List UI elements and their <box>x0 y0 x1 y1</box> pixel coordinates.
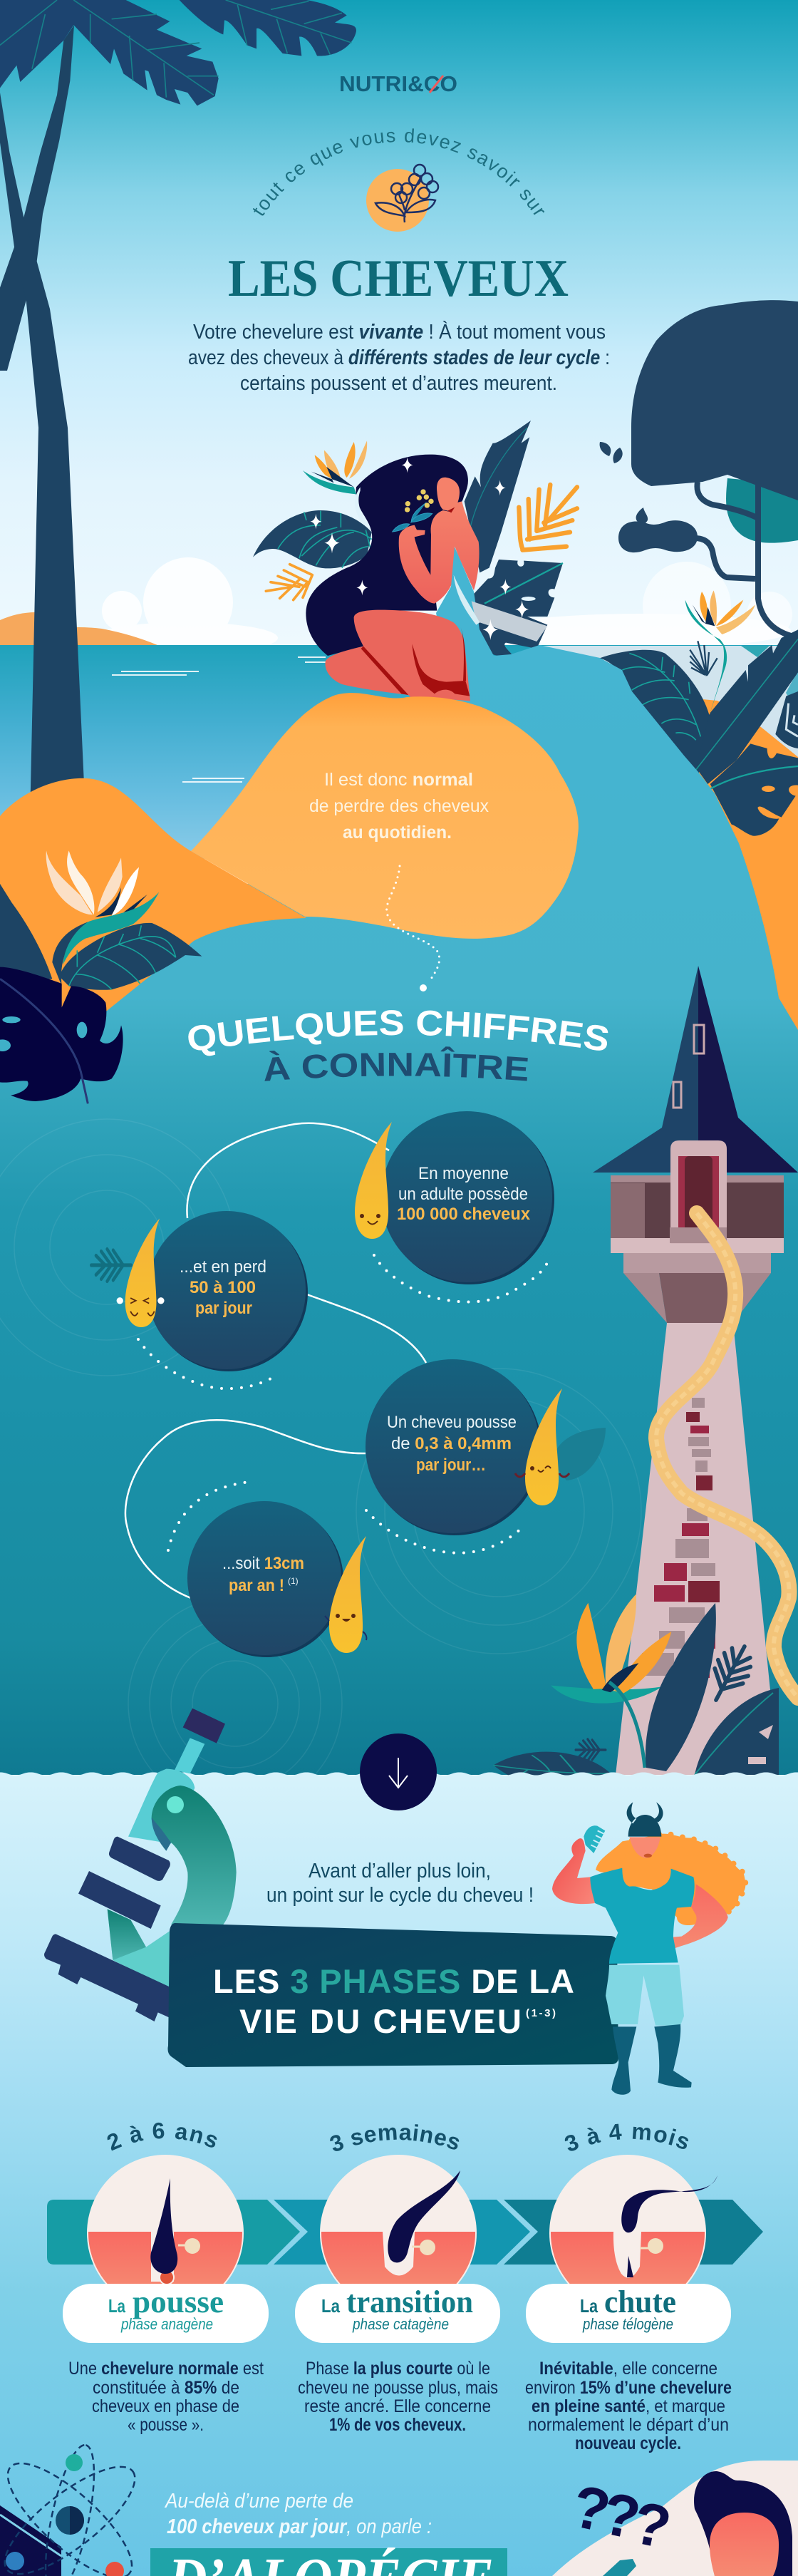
clouds <box>93 557 792 654</box>
diagram <box>87 2155 244 2284</box>
torso <box>590 1868 695 1964</box>
viking character <box>552 1802 745 2095</box>
eyepiece <box>183 1709 225 1743</box>
stat circle 1 <box>381 1111 554 1284</box>
label pill: phase catagène <box>352 2315 449 2333</box>
dotted arcs <box>138 1255 549 1553</box>
white bird of paradise <box>46 850 93 915</box>
veined leaf <box>59 923 202 990</box>
left arm <box>552 1838 595 1904</box>
distant island <box>0 612 157 645</box>
label pill: transition <box>346 2284 473 2319</box>
navy monstera <box>0 967 123 1101</box>
description: 1% de vos cheveux. <box>329 2415 466 2435</box>
stat circle 3: de 0,3 à 0,4mm <box>391 1434 512 1453</box>
right orange shore <box>608 693 798 1030</box>
description: environ 15% d’une chevelure <box>525 2378 732 2398</box>
stat circle 4: (1) <box>288 1576 299 1586</box>
heading: quelques chiffres <box>188 1010 608 1081</box>
duration: 2 à 6 ans <box>107 2123 217 2151</box>
sheer veil band <box>472 601 547 642</box>
shorts <box>606 1965 684 2026</box>
veined leaf <box>600 650 716 775</box>
banner: les 3 phases: LES 3 PHASES DE LA <box>213 1962 574 2000</box>
tower <box>593 966 798 1775</box>
title: LES CHEVEUX <box>228 249 569 308</box>
torso and arm <box>399 501 480 604</box>
spire <box>698 966 798 1173</box>
second palm leaf <box>180 0 356 56</box>
background fern and monstera behind stats <box>91 1249 606 1480</box>
intro text: Votre chevelure est vivante ! À tout moment vous <box>193 320 606 344</box>
wall <box>611 1175 784 1238</box>
stat circle 3: Un cheveu pousse <box>387 1413 517 1432</box>
heading: quelques chiffres: QUELQUES CHIFFRES <box>188 1010 608 1056</box>
dotted path from blob <box>387 866 440 991</box>
diagram <box>549 2155 717 2284</box>
light body <box>128 1769 195 1844</box>
banner: les 3 phases <box>168 1923 618 2067</box>
teal petal <box>52 922 88 986</box>
face <box>629 1837 660 1858</box>
stat circle 4: ...soit 13cm <box>222 1554 304 1573</box>
description: normalement le départ d’un <box>528 2415 729 2435</box>
duration: 3 à 4 mois <box>564 2124 688 2151</box>
flower sprig <box>393 503 432 532</box>
label pill: La <box>321 2295 340 2317</box>
right arm <box>664 1884 728 1949</box>
sparkles over woman <box>310 457 529 640</box>
thigh <box>325 610 470 723</box>
description: reste ancré. Elle concerne <box>304 2396 491 2416</box>
label pill <box>295 2284 500 2343</box>
stat circle 2: par jour <box>195 1299 252 1318</box>
blob text: Il est donc normal <box>324 770 473 790</box>
blob text: de perdre des cheveux <box>309 796 489 816</box>
face <box>437 478 460 511</box>
main palm leaf <box>0 0 219 105</box>
label pill: phase anagène <box>120 2315 213 2333</box>
curly hair <box>596 1834 745 1925</box>
stat circle 2 <box>147 1211 308 1371</box>
label pill: phase télogène <box>582 2315 673 2333</box>
lens dot <box>167 1796 184 1813</box>
alopecia intro text: Au-delà d’une perte de <box>164 2490 353 2513</box>
shaft <box>616 1323 779 1775</box>
blob text <box>309 770 489 843</box>
intro text <box>188 320 610 395</box>
description: Inévitable, elle concerne <box>539 2359 717 2379</box>
stat circle 1: un adulte possède <box>398 1185 528 1204</box>
braid <box>656 1213 798 1698</box>
label pill: La <box>108 2295 125 2317</box>
woman: background plants and upper body <box>253 421 577 656</box>
right shore plants <box>600 590 798 836</box>
heading: quelques chiffres: À CONNAÎTRE <box>264 1046 528 1081</box>
dark leg shading <box>412 644 470 696</box>
blob text: au quotidien. <box>343 823 452 843</box>
phase 1: la pousse <box>63 2123 269 2435</box>
description: constituée à 85% de <box>93 2378 239 2398</box>
upper bar <box>109 1837 170 1881</box>
tube <box>175 1738 204 1773</box>
stat circle 2: ...et en perd <box>180 1257 266 1277</box>
question marks: ? <box>566 2472 616 2545</box>
middle bar <box>78 1871 161 1929</box>
base column <box>108 1909 176 1991</box>
monstera <box>710 743 798 836</box>
bricks <box>642 1398 715 1676</box>
description: nouveau cycle. <box>575 2433 681 2453</box>
right jungle tree <box>600 300 798 636</box>
question marks <box>566 2472 677 2562</box>
hair <box>306 455 468 656</box>
phase 2: la transition <box>295 2124 500 2435</box>
intro text: certains poussent et d’autres meurent. <box>240 372 557 395</box>
bird of paradise <box>700 592 708 622</box>
monstera <box>472 560 563 656</box>
banner: les 3 phases: VIE DU CHEVEU <box>239 2002 522 2040</box>
wavy edge <box>0 1771 798 1779</box>
left orange hill <box>0 778 306 1011</box>
connecting white lines <box>125 1123 426 1598</box>
label pill <box>63 2284 269 2343</box>
description <box>68 2359 264 2435</box>
stat circle 4 <box>187 1501 343 1657</box>
base bar <box>44 1934 171 2021</box>
navy leaf at edge <box>0 884 52 982</box>
sea <box>0 645 798 859</box>
face <box>710 2513 779 2576</box>
hair and beard <box>694 2471 792 2576</box>
label pill: La <box>580 2295 598 2317</box>
sky background <box>0 0 798 645</box>
duration: 3 semaines <box>330 2124 459 2151</box>
ledge <box>611 1238 784 1253</box>
leaf left <box>253 510 372 568</box>
small orange fern <box>266 565 312 600</box>
description: « pousse ». <box>128 2415 204 2435</box>
icon: microscope <box>44 1709 237 2021</box>
phase 3: la chute <box>525 2124 732 2453</box>
alopecia intro text: 100 cheveux par jour, on parle : <box>167 2515 432 2538</box>
small fern <box>690 641 717 676</box>
orange blob island <box>191 693 579 939</box>
trunks <box>0 25 74 371</box>
stat circle 3: par jour… <box>416 1456 486 1475</box>
label pill <box>526 2284 731 2343</box>
orange fern right <box>519 485 577 550</box>
sea highlights <box>112 657 611 782</box>
bird of paradise <box>315 455 333 480</box>
question marks: ? <box>627 2488 677 2562</box>
arrow button <box>360 1733 437 1810</box>
intro text: avez des cheveux à différents stades de leur cycle : <box>188 346 610 369</box>
description: Phase la plus courte où le <box>306 2359 490 2379</box>
lower light section <box>0 1778 798 2576</box>
description <box>298 2359 498 2435</box>
hair characters <box>117 1122 569 1653</box>
description: en pleine santé, et marque <box>532 2396 725 2416</box>
curved tagline: tout ce que vous devez savoir sur <box>252 128 544 215</box>
description <box>525 2359 732 2453</box>
logo: NUTRI&CO <box>339 71 457 96</box>
timeline arrows <box>47 2200 763 2265</box>
intro line before phases: Avant d’aller plus loin, <box>309 1860 491 1882</box>
icon: orange circle with flower <box>366 165 438 232</box>
dormer <box>670 1140 727 1244</box>
palm tree left <box>0 0 356 820</box>
stat circle 1: 100 000 cheveux <box>397 1205 531 1224</box>
boots <box>611 2024 692 2095</box>
stat circle 2: 50 à 100 <box>190 1278 256 1297</box>
tower foot plants <box>492 1587 779 1794</box>
alopecia intro text <box>164 2490 432 2538</box>
water swirl texture <box>0 1119 641 1810</box>
beard <box>622 1837 671 1889</box>
label pill: pousse <box>133 2284 224 2319</box>
comb <box>603 2559 636 2576</box>
stat circle 1: En moyenne <box>418 1164 509 1183</box>
label pill: chute <box>604 2284 676 2319</box>
description: Une chevelure normale est <box>68 2359 264 2379</box>
description: cheveu ne pousse plus, mais <box>298 2378 498 2398</box>
comb <box>584 1825 605 1853</box>
far right fern <box>775 691 798 748</box>
stat circle 3 <box>366 1359 542 1535</box>
question marks: ? <box>596 2479 646 2552</box>
long feather leaf <box>696 629 798 784</box>
pale sea at right <box>542 646 798 777</box>
description: cheveux en phase de <box>92 2396 239 2416</box>
left shore plants <box>0 850 202 1103</box>
bottom right character <box>552 2461 798 2576</box>
diagram <box>320 2155 477 2284</box>
teal water section <box>0 547 798 1775</box>
green arm <box>152 1786 237 1925</box>
intro line before phases <box>266 1860 534 1907</box>
banner: les 3 phases: (1-3) <box>526 2007 556 2019</box>
icon: atom <box>0 2441 150 2576</box>
helmet <box>627 1802 663 1837</box>
intro line before phases: un point sur le cycle du cheveu ! <box>266 1884 534 1907</box>
leaf veins <box>0 0 351 98</box>
woman: legs and sheer veil <box>325 575 547 723</box>
stat circle 4: par an ! <box>229 1576 284 1595</box>
corbel <box>623 1253 771 1273</box>
tall feather leaf <box>465 421 531 572</box>
